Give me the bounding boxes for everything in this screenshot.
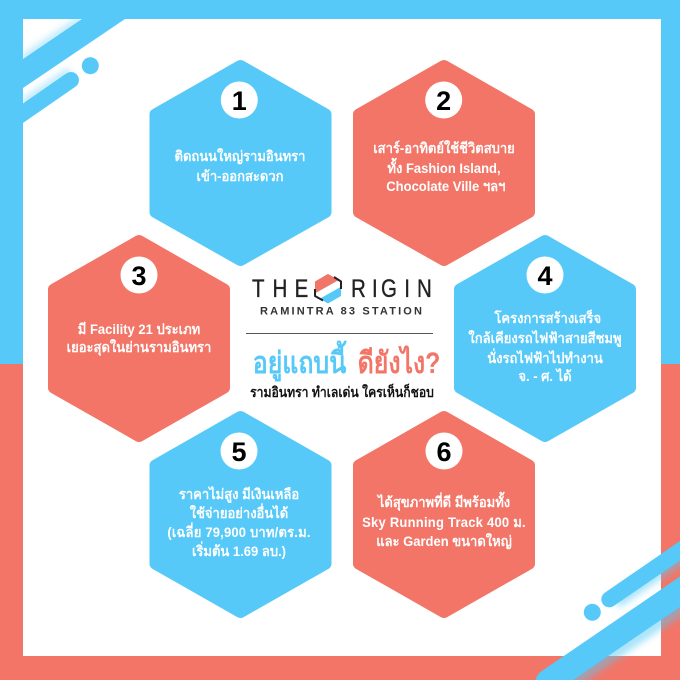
- hexagon 4: โครงการสร้างเสร็จ: [493, 309, 601, 326]
- heading: ดียังไง?: [358, 345, 440, 380]
- hexagon 5: (เฉลี่ย 79,900 บาท/ตร.ม.: [167, 521, 311, 540]
- hexagon 2: ทั้ง Fashion Island,: [387, 157, 501, 176]
- hexagon 5: เริ่มต้น 1.69 ลบ.): [192, 540, 286, 559]
- hexagon 5: [156, 417, 326, 612]
- logo: The Origin: RAMINTRA 83 STATION: [260, 306, 424, 318]
- hexagon 1: 1: [232, 86, 247, 116]
- hexagon 3: มี Facility 21 ประเภท: [78, 322, 200, 337]
- divider line: [246, 333, 433, 334]
- hexagon 3: เยอะสุดในย่านรามอินทรา: [67, 339, 211, 356]
- hexagon 6: [359, 417, 529, 612]
- subheading: รามอินทรา ทำเลเด่น ใครเห็นก็ชอบ: [250, 382, 434, 400]
- hexagon 2: เสาร์-อาทิตย์ใช้ชีวิตสบาย: [373, 140, 515, 156]
- hexagon 3: [54, 241, 224, 436]
- logo: The Origin: [252, 274, 430, 314]
- hexagon 6: และ Garden ขนาดใหญ่: [376, 533, 512, 550]
- hexagon 4: ใกล้เคียงรถไฟฟ้าสายสีชมพู: [468, 330, 622, 347]
- hexagon 5: ใช้จ่ายอย่างอื่นได้: [190, 502, 288, 521]
- hexagon 3: 3: [131, 261, 147, 291]
- top-left diagonal decoration: [0, 0, 140, 143]
- hexagon 4: จ. - ศ. ได้: [518, 368, 572, 384]
- hexagon 1: [156, 66, 326, 260]
- hexagon 4: 4: [537, 261, 553, 291]
- bottom-right diagonal decoration: [548, 537, 680, 680]
- hexagon 6: 6: [436, 437, 452, 467]
- hexagon 4: [460, 241, 630, 436]
- hexagon 6: ได้สุขภาพที่ดี มีพร้อมทั้ง: [376, 491, 510, 511]
- hexagon 2: Chocolate Ville ฯลฯ: [386, 179, 506, 194]
- heading: [253, 340, 440, 382]
- hexagon 4: นั่งรถไฟฟ้าไปทำงาน: [487, 347, 604, 366]
- heading: อยู่แถบนี้: [253, 340, 347, 382]
- logo: The Origin: RIGIN: [351, 274, 432, 302]
- hexagon 5: ราคาไม่สูง มีเงินเหลือ: [179, 486, 299, 503]
- hexagon 2: [359, 66, 529, 260]
- hexagon 1: เข้า-ออกสะดวก: [197, 169, 283, 184]
- hexagon 1: ติดถนนใหญ่รามอินทรา: [175, 148, 305, 165]
- hexagon 5: 5: [231, 437, 247, 467]
- hexagon 6: Sky Running Track 400 ม.: [362, 515, 526, 530]
- hexagon 2: 2: [436, 86, 451, 116]
- logo: The Origin: THE: [252, 274, 308, 302]
